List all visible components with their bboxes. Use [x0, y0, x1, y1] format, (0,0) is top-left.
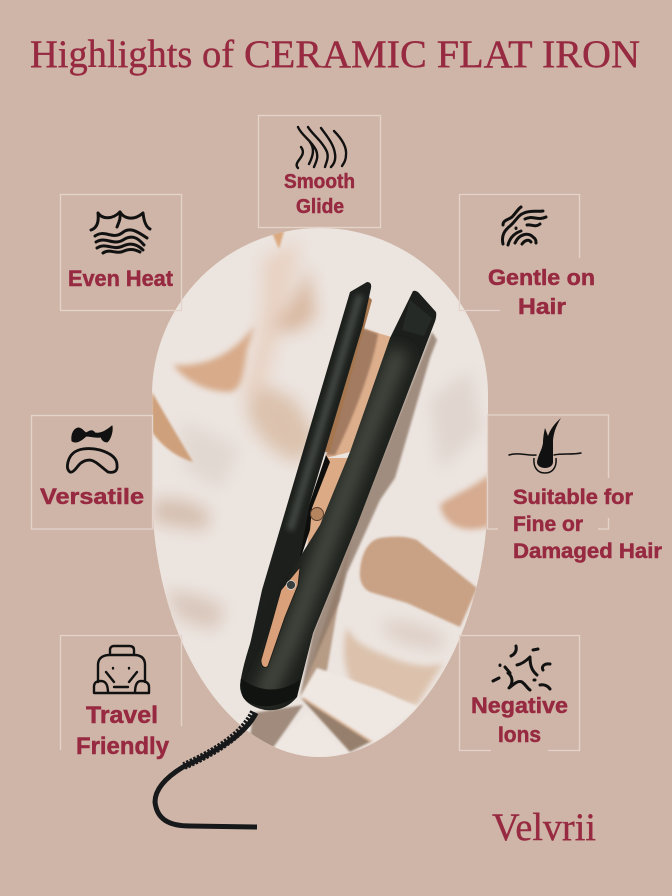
card: gentle on hair [460, 194, 595, 319]
ceramic plate [326, 328, 391, 458]
card: suitable for fine or damaged hair [488, 415, 662, 563]
copper strip [261, 567, 300, 667]
card: suitable for fine or damaged hair: Fine or [513, 513, 583, 536]
card: gentle on hair: Hair [518, 294, 566, 319]
icon: curly hair [502, 207, 546, 245]
card: even heat: Even Heat [68, 266, 174, 291]
icon: heat waves [91, 212, 150, 253]
card: suitable for fine or damaged hair: Suitable for [513, 486, 633, 509]
card: travel friendly: Friendly [76, 733, 170, 760]
card: even heat [60, 194, 182, 310]
cord [155, 712, 257, 827]
card: negative ions [460, 636, 580, 750]
icon: travel bag [94, 646, 149, 693]
card: versatile [32, 416, 152, 529]
icon: wavy strands [297, 127, 346, 168]
card: travel friendly: Travel [86, 702, 158, 729]
left arm [240, 282, 372, 690]
brand name: Velvrii [492, 806, 596, 849]
card: negative ions: Negative [471, 693, 568, 718]
icon: ion burst [493, 646, 550, 690]
card: gentle on hair: Gentle on [488, 265, 595, 290]
card: smooth glide: Glide [296, 196, 344, 218]
photo: satin fabric oval [140, 220, 500, 765]
fabric folds [173, 325, 490, 705]
title [30, 33, 640, 76]
title: Highlights of [30, 33, 234, 76]
icon: hair follicle [509, 418, 581, 473]
card: suitable for fine or damaged hair: Damaged Hair [513, 540, 662, 563]
copper hinge [306, 458, 348, 560]
card: smooth glide [258, 116, 380, 228]
card: smooth glide: Smooth [284, 171, 355, 193]
soft shadow of iron [300, 332, 437, 697]
dark gap [296, 455, 330, 560]
card: travel friendly [60, 636, 182, 760]
card: versatile: Versatile [40, 484, 144, 509]
title: CERAMIC FLAT IRON [244, 33, 640, 76]
card: negative ions: Ions [498, 722, 541, 747]
comb edge [324, 297, 372, 452]
right arm and handle [240, 290, 436, 710]
flat iron [155, 275, 445, 827]
power button [286, 580, 296, 590]
icon: styling tool [67, 426, 117, 472]
